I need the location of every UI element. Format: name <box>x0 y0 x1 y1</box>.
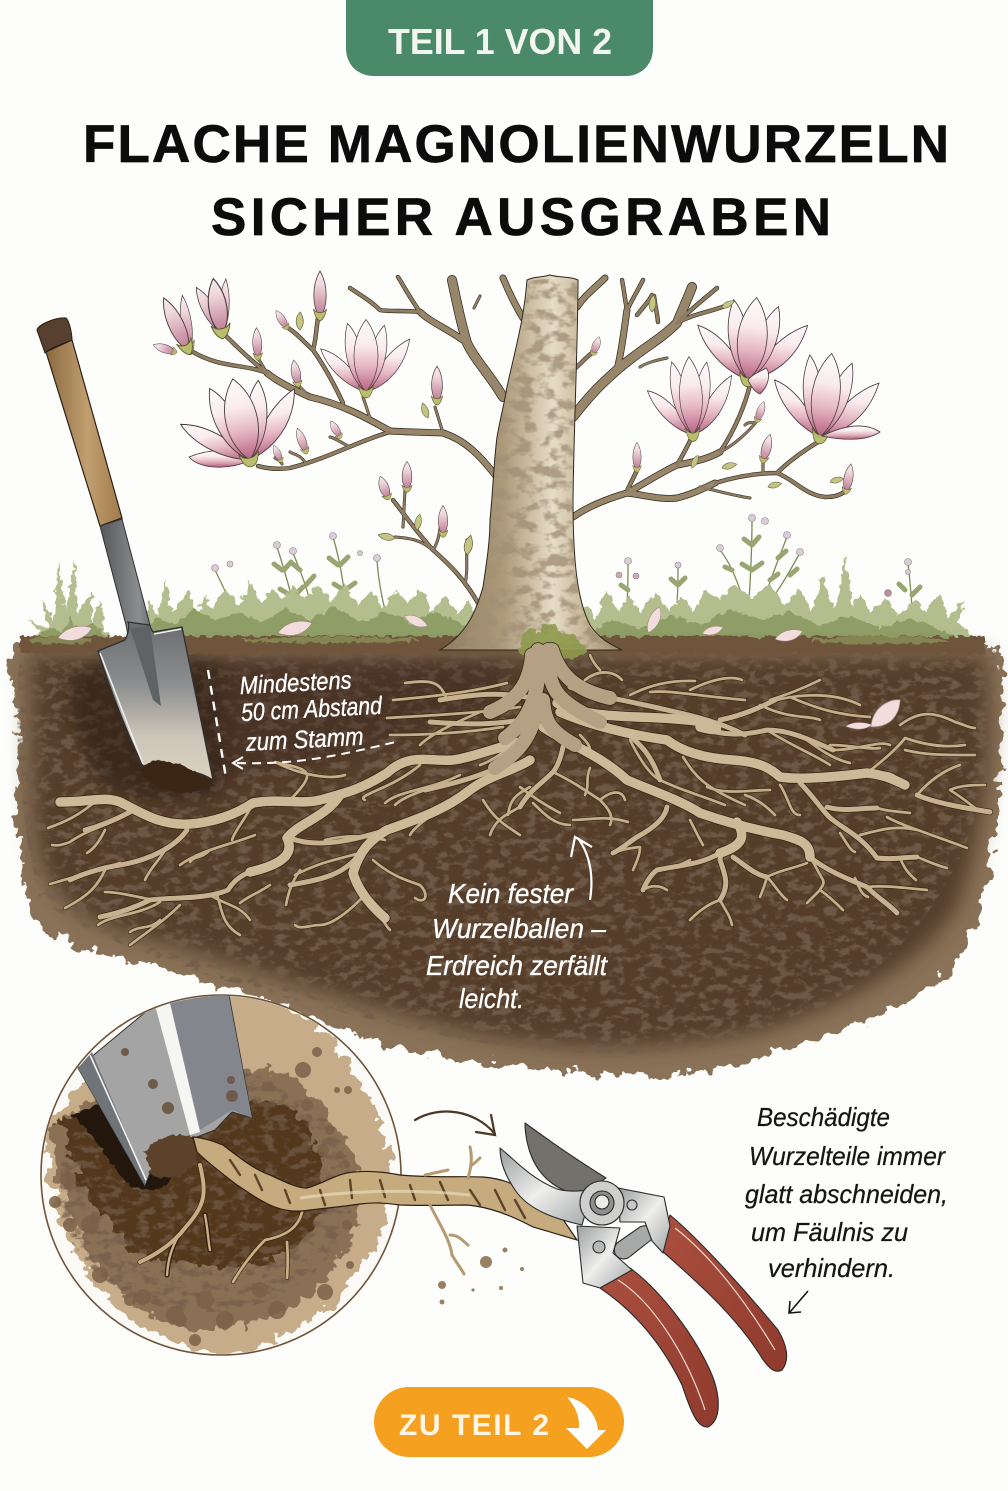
magnolia tree <box>152 271 882 668</box>
button: to part 2 <box>374 1387 624 1457</box>
icon: arrow down <box>566 1397 606 1449</box>
callout: cut damaged roots cleanly: verhindern. <box>768 1253 895 1283</box>
clod over blade <box>145 1135 197 1178</box>
spade shank <box>100 519 160 705</box>
root system <box>48 650 990 945</box>
grass left <box>25 560 482 640</box>
callout: cut damaged roots cleanly: um Fäulnis zu <box>751 1217 908 1247</box>
title: FLACHE MAGNOLIENWURZELN <box>83 115 949 174</box>
grass right <box>580 555 985 648</box>
callout: minimum distance to trunk: zum Stamm <box>244 723 364 757</box>
pivot <box>580 1181 624 1225</box>
cutting blade <box>525 1123 606 1194</box>
callout: no solid root ball: Kein fester <box>448 878 575 909</box>
arrow: root to pruner <box>415 1112 495 1135</box>
soil cross-section <box>11 636 1002 1074</box>
soil texture <box>17 650 996 1054</box>
callout: minimum distance to trunk <box>208 665 400 778</box>
lower handle <box>600 1268 718 1427</box>
banner: part 1 of 2: TEIL 1 VON 2 <box>388 21 612 62</box>
upper handle <box>661 1215 787 1371</box>
fallen petals <box>58 606 907 731</box>
callout: cut damaged roots cleanly <box>745 1102 948 1313</box>
icon: spade <box>37 318 214 793</box>
spring <box>614 1226 653 1259</box>
blossoms left <box>152 271 473 555</box>
topsoil band <box>20 636 985 654</box>
title <box>83 115 949 247</box>
upper metal arm <box>618 1188 670 1253</box>
plant stems with leaves <box>215 520 920 630</box>
branches <box>193 277 846 603</box>
callout: no solid root ball: Wurzelballen – <box>432 913 606 944</box>
callout: no solid root ball: Erdreich zerfällt <box>426 950 608 981</box>
cut root <box>193 1137 577 1304</box>
small roots in circle <box>140 1165 303 1282</box>
button: to part 2: ZU TEIL 2 <box>399 1409 549 1442</box>
spade blade in circle <box>78 990 252 1186</box>
lower metal arm <box>577 1226 632 1288</box>
dark soil <box>60 1102 324 1267</box>
tan soil halo <box>42 993 395 1351</box>
trunk <box>440 275 622 650</box>
moss at trunk base <box>518 624 588 668</box>
callout: no solid root ball: leicht. <box>459 983 524 1014</box>
callout: minimum distance to trunk: 50 cm Abstand <box>240 692 384 727</box>
ground vegetation <box>25 514 985 648</box>
soil blobs <box>49 1047 354 1346</box>
callout: cut damaged roots cleanly: glatt abschneiden, <box>745 1179 948 1209</box>
spade handle <box>46 340 122 526</box>
detail circle: exposed root with spade <box>41 990 401 1355</box>
dark trench below topsoil <box>215 662 505 780</box>
hook blade <box>500 1148 592 1225</box>
icon: pruning shears <box>500 1123 787 1427</box>
banner: part 1 of 2 <box>346 0 653 76</box>
callout: minimum distance to trunk: Mindestens <box>239 666 352 700</box>
callout: no solid root ball <box>426 837 608 1014</box>
shovel hole <box>69 655 224 800</box>
callout: cut damaged roots cleanly: Beschädigte <box>757 1102 890 1132</box>
mid soil <box>48 1067 359 1330</box>
blossoms right <box>589 292 882 495</box>
spade blade <box>98 622 213 780</box>
title: SICHER AUSGRABEN <box>211 188 831 247</box>
callout: cut damaged roots cleanly: Wurzelteile immer <box>749 1141 946 1171</box>
